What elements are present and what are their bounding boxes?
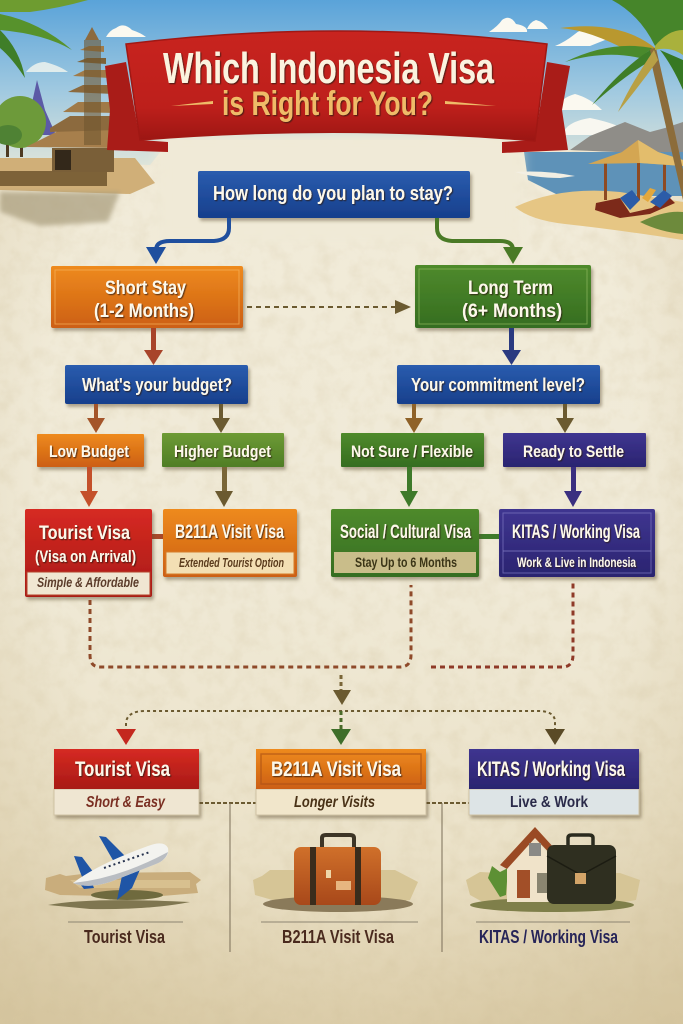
connector: social to kitas: [477, 534, 501, 539]
card: b211a: B211A Visit Visa: [175, 522, 284, 543]
purple temple: [24, 80, 56, 135]
box: ready to settle: [503, 433, 646, 467]
label: tourist visa: Tourist Visa: [84, 927, 166, 947]
summary: tourist visa: [54, 749, 199, 815]
arrow: center down: [333, 690, 351, 705]
distribution arrows: [116, 711, 565, 745]
title line 2: is Right for You?: [222, 85, 433, 123]
arrow: commitment to not sure: [405, 404, 423, 433]
card: tourist visa: Tourist Visa: [39, 523, 130, 544]
arrow: commitment to ready: [556, 404, 574, 433]
ribbon main: [126, 31, 547, 141]
question: budget: What's your budget?: [82, 375, 232, 395]
question: how long: [198, 171, 470, 218]
arrow: long to commitment: [502, 328, 521, 365]
parchment fade below banner: [158, 132, 520, 242]
card: social cultural: Social / Cultural Visa: [340, 522, 471, 543]
arrow: ready to kitas: [564, 467, 582, 507]
box: long term: (6+ Months): [462, 301, 562, 322]
card: social cultural: Stay Up to 6 Months: [355, 554, 457, 570]
question: commitment: [397, 365, 600, 404]
arrow: budget to low: [87, 404, 105, 433]
rules under icons: [68, 921, 630, 923]
tree: [0, 96, 46, 157]
sky: [0, 0, 683, 165]
summary: kitas: KITAS / Working Visa: [477, 758, 625, 781]
label: kitas working visa: KITAS / Working Visa: [479, 927, 619, 947]
title line 1: Which Indonesia Visa: [163, 44, 494, 93]
icon: house and briefcase: [466, 827, 640, 912]
box: higher budget: [162, 433, 284, 467]
summary: b211a: [256, 749, 426, 815]
title banner: [105, 31, 570, 153]
box: short stay: [51, 266, 243, 328]
icon: suitcase: [253, 835, 418, 912]
left palm: [0, 0, 88, 78]
box: short stay: (1-2 Months): [94, 301, 194, 322]
scene: tropical sky and landscape header: [0, 0, 683, 242]
arrow: low to tourist: [80, 467, 98, 507]
box: long term: [415, 265, 591, 328]
card: b211a: Extended Tourist Option: [179, 555, 284, 570]
left ground: [0, 158, 155, 194]
card: b211a: [163, 509, 297, 577]
sea: [524, 152, 683, 196]
arrow: short to budget: [144, 328, 163, 365]
box: low budget: [37, 434, 144, 467]
arrow: to long term: [437, 218, 523, 264]
summary: b211a: Longer Visits: [294, 794, 375, 811]
arrow: higher to b211a: [215, 467, 233, 507]
mountains: [570, 122, 683, 155]
box: not sure: Not Sure / Flexible: [351, 442, 473, 461]
pagoda: [26, 27, 118, 172]
box: long term: Long Term: [468, 278, 553, 299]
box: not sure: [341, 433, 484, 467]
flourish right: [445, 101, 496, 106]
flourish left: [171, 101, 213, 106]
summary: kitas: Live & Work: [510, 794, 588, 811]
label: b211a visit visa: B211A Visit Visa: [282, 927, 395, 947]
summary: kitas: [469, 749, 639, 815]
icon: airplane: [45, 836, 201, 909]
box: low budget: Low Budget: [49, 442, 129, 461]
arrow: to short stay: [146, 218, 229, 264]
right palm: [560, 0, 683, 200]
box: ready to settle: Ready to Settle: [523, 442, 624, 461]
card: kitas: Work & Live in Indonesia: [517, 554, 636, 570]
question: how long: How long do you plan to stay?: [213, 183, 453, 205]
gazebo: [588, 140, 683, 218]
summary: tourist visa: Tourist Visa: [75, 758, 170, 781]
card: tourist visa: [25, 509, 152, 597]
lines linking summary cards: [199, 803, 469, 952]
card: social cultural: [331, 509, 479, 577]
question: budget: [65, 365, 248, 404]
card: tourist visa: Simple & Affordable: [37, 574, 139, 590]
ribbon tails: [105, 62, 168, 152]
arrow: dotted short to long: [247, 300, 411, 314]
card: kitas: [499, 509, 655, 577]
arrow: not sure to social: [400, 467, 418, 507]
dashed connectors converging: [90, 582, 573, 690]
box: higher budget: Higher Budget: [174, 442, 271, 461]
summary: tourist visa: Short & Easy: [86, 794, 166, 811]
sand right: [515, 191, 683, 240]
summary: b211a: B211A Visit Visa: [271, 758, 401, 781]
connector: tourist to b211a: [150, 534, 165, 539]
card: tourist visa: (Visa on Arrival): [35, 547, 136, 566]
clouds: [26, 18, 622, 135]
arrow: budget to higher: [212, 404, 230, 433]
question: commitment: Your commitment level?: [411, 375, 585, 395]
box: short stay: Short Stay: [105, 278, 186, 299]
